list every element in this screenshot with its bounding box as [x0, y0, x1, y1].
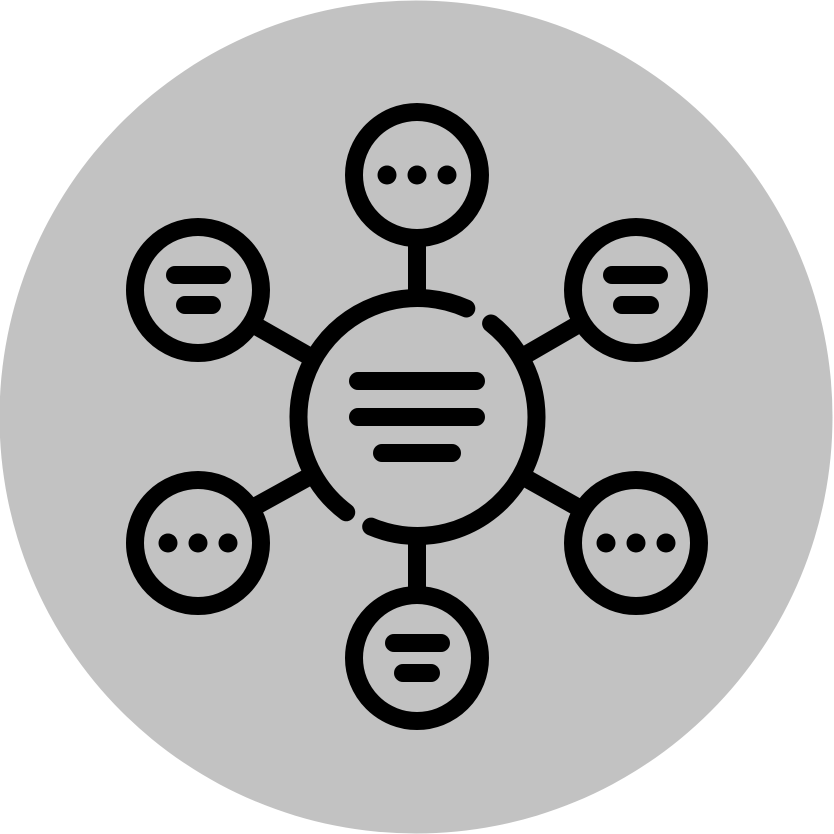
central hub text lines [358, 381, 476, 453]
lower right node [573, 480, 699, 606]
bottom node [354, 595, 480, 721]
connector lines [256, 240, 579, 594]
upper right node [573, 227, 699, 353]
lower left node [135, 480, 261, 606]
central hub ring [250, 250, 585, 584]
icon: network diagram [135, 112, 699, 721]
top node [354, 112, 480, 238]
upper left node [135, 227, 261, 353]
